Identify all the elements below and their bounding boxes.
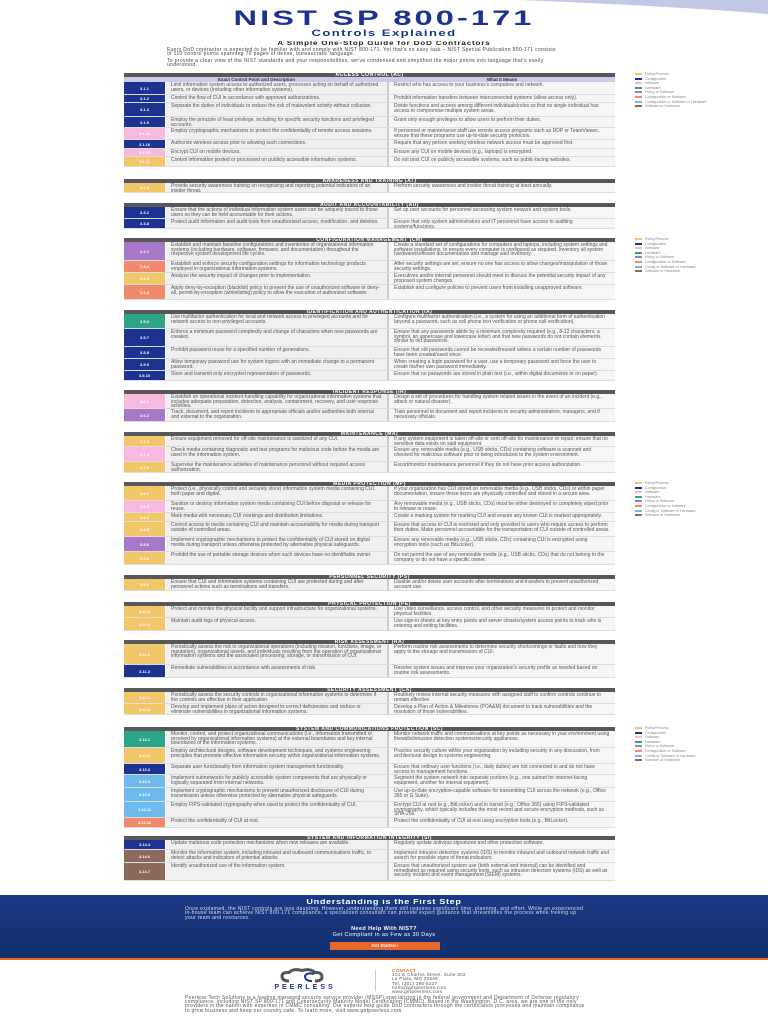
contact block: hello@getpeerless.com [392,985,446,990]
panel: media protection: 3.8.1 [140,490,149,496]
legend 1: Software or Hardware [645,104,680,108]
panel: access control: If personnel or maintenance staff use remote access programs such as RDP or TeamViewer, ensure that these programs use up-to-date security protocols. [394,128,599,139]
panel: media protection: 3.8.4 [140,514,149,520]
panel: configuration management: Executives and/or internal personnel should meet to discuss the potential security impact of any proposed system changes. [394,273,606,284]
panel: media protection: Protect (i.e., physically control and securely store) information system media containing CUI, both paper and digital. [171,486,375,497]
panel: media protection [124,481,615,565]
panel: system and information integrity: SYSTEM AND INFORMATION INTEGRITY (SI) [307,835,432,841]
panel: personnel security: 3.9.2 [140,582,149,587]
panel: incident response: 3.6.1 [140,398,149,404]
legend 3: Policy/Process [645,481,669,485]
button: get started: Get Started › [371,943,398,948]
legend 4: Config or Software or Hardware [645,754,696,758]
panel: configuration management [124,237,615,300]
contact block: 101 E Charles Street, Suite 302 [392,972,466,977]
panel: access control: 3.1.3 [140,107,149,112]
contact block: www.getpeerless.com [392,989,442,994]
panel: media protection: Ensure that access to CUI is restricted and only provided to users who require access to perform their duties. Make personnel accountable for the transportation of CUI outside of controlled areas. [394,522,610,533]
banner heading: Understanding is the First Step [306,899,462,906]
panel: system and communications protection: Protect the confidentiality of CUI at rest. [171,818,259,824]
banner: understanding is the first step [0,895,768,960]
panel: personnel security: Ensure that CUI and information systems containing CUI are protected during and after personnel actions such as terminations and transfers. [171,579,364,590]
panel: system and information integrity: Update malicious code protection mechanisms when new releases are available. [171,840,350,846]
panel: security assessment: 3.12.2 [139,706,150,712]
call to action text [332,926,435,938]
panel: access control: 3.1.5 [140,120,149,124]
panel: maintenance: Ensure equipment removed for off-site maintenance is sanitized of any CUI. [171,436,338,442]
panel: system and communications protection: 3.13.1 [139,736,150,742]
legend 4: Policy or Software [645,744,674,748]
panel: security assessment: SECURITY ASSESSMENT (CA) [327,687,412,693]
panel: security assessment: Routinely review internal security measures with assigned staff to confirm controls continue to remain effective. [394,692,601,703]
panel: access control: Restrict who has access to your business's computers and network. [394,82,544,88]
panel: media protection: 3.8.8 [140,556,149,560]
panel: media protection: MEDIA PROTECTION (MP) [333,481,406,487]
panel: identification and authentication: Configure multifactor authentication (i.e., a system for using an additional form of authentication beyond a password, such as cell phone text verification or phone call verification). [394,314,605,325]
legend 3: Configuration [645,486,666,490]
panel: audit and accountability [124,202,615,229]
legend 3: Software [645,490,659,494]
panel: configuration management: 3.4.2 [140,264,149,269]
panel: physical protection: 3.10.4 [139,622,150,626]
legend 2: Software or Hardware [645,269,680,273]
divider [375,970,376,991]
panel: security assessment: 3.12.1 [139,695,150,700]
panel: identification and authentication: 3.5.7 [140,335,149,340]
panel: access control: 3.1.1 [140,86,149,90]
panel: system and information integrity: Implement intrusion detection systems (IDS) to monitor inbound and outbound network traffic and search for possible signs of threat indicators. [394,850,609,861]
legend 2: Hardware [645,251,661,255]
panel: access control: Encrypt CUI on mobile devices. [171,149,241,155]
title: NIST SP 800-171 [233,7,535,30]
panel: system and communications protection: Monitor network traffic and communications at key points as necessary in your environment using firewalls/intrusion detection systems/security appliances. [394,731,609,742]
panel: system and communications protection: 3.13.3 [139,766,150,772]
contact block: CONTACT [392,968,416,973]
panel: system and communications protection: Segment the system network into separate portions (e.g., one subnet for internet-facing equipment, another for internal equipment). [394,775,587,786]
panel: access control: 3.1.2 [140,96,149,101]
legend 4: Hardware [645,740,661,744]
panel: risk assessment: 3.11.1 [139,652,150,656]
panel: system and information integrity: 3.14.4 [139,842,150,847]
panel: awareness and training: 3.2.3 [140,185,149,190]
panel: risk assessment: Remediate vulnerabilities in accordance with assessments of risk. [171,665,316,671]
panel: security assessment [124,687,615,715]
legend 2: Policy/Process [645,237,669,241]
panel: system and communications protection: Employ FIPS-validated cryptography when used to protect the confidentiality of CUI. [171,802,357,808]
panel: system and communications protection: Implement subnetworks for publicly accessible system components that are physically or logically separated from internal networks. [171,775,367,786]
panel: personnel security: PERSONNEL SECURITY (PS) [329,574,410,580]
panel: maintenance: Check media containing diagnostic and test programs for malicious code before the media are used in the information system. [171,447,379,458]
panel: identification and authentication: When creating a login password for a user, use a temporary password and force the user to create his/her own password immediately. [394,359,596,370]
panel: configuration management: Establish and maintain baseline configurations and inventories of organizational information systems (including hardware, software, firmware, and documentation) throughout the respective system development life cycles. [171,242,373,257]
panel: system and information integrity: 3.14.7 [139,869,150,874]
legend 4: Configuration or Software [645,749,686,753]
panel: incident response: INCIDENT RESPONSE (IR) [333,389,406,395]
panel: access control: Ensure any CUI on mobile devices (e.g., laptops) is encrypted. [394,149,532,155]
legend 4: Policy/Process [645,726,669,730]
panel: system and communications protection: Monitor, control, and protect organizational communications (i.e., information transmitted or received by organizational information systems) at the external boundaries and key internal boundaries of the information systems. [171,731,372,746]
logo: peerless [274,968,336,991]
panel: system and communications protection: Use up-to-date encryption-capable software for transmitting CUI across the network (e.g., Office 365 or G Suite). [394,788,606,799]
panel: incident response: Track, document, and report incidents to appropriate officials and/or authorities both internal and external to the organization. [171,409,374,420]
panel: identification and authentication: Ensure that old passwords cannot be recreated/reused unless a certain number of passwords have been created/used since. [394,347,601,358]
panel: system and communications protection: Practice security culture within your organization by including security in any discussion, from architectural design to systems engineering. [394,748,600,759]
panel: physical protection: PHYSICAL PROTECTION (PE) [328,601,411,607]
panel: risk assessment: 3.11.3 [139,668,150,674]
panel: media protection: Create a marking system for marking CUI and ensure any known CUI is marked appropriately. [394,513,602,519]
panel: physical protection: Use sign-in sheets at key entry points and server closets/system access points to track who is entering and exiting facilities. [394,618,601,629]
panel: identification and authentication: Allow temporary password use for system logons with an immediate change to a permanent password. [171,359,374,370]
panel: access control: Exact Control Point and Description [218,77,295,82]
panel: physical protection: 3.10.2 [139,609,150,614]
panel: incident response: 3.6.2 [140,412,149,418]
panel: risk assessment: Perform routine risk assessments to determine security shortcomings or faults and how they apply to the storage and transmission of CUI. [394,644,597,655]
legend 4 [635,726,696,762]
panel: identification and authentication: IDENTIFICATION AND AUTHENTICATION (IA) [307,309,432,315]
panel: access control: Do not post CUI on publicly accessible systems, such as public-facing websites. [394,157,571,163]
panel: access control: Limit information system access to authorized users, processes acting on behalf of authorized users, or devices (including other information systems). [171,82,378,93]
panel: personnel security [124,574,615,591]
panel: system and information integrity: Ensure that unauthorized system use (both external and internal) can be identified and remediated as required using security tools, such as intrusion detection systems (IDS) as well as security incident and event management (SIEM) systems. [394,863,607,878]
panel: configuration management: Apply deny-by-exception (blacklist) policy to prevent the use of unauthorized software or deny-all, permit-by-exception (whitelisting) policy to allow the execution of authorized software. [171,285,380,296]
panel: configuration management: Establish and configure policies to prevent users from installing unapproved software. [394,285,583,291]
panel: personnel security: Disable and/or delete user accounts after terminations and transfers to prevent unauthorized account use. [394,579,598,590]
panel: audit and accountability: Set up user accounts for personnel accessing system network and system tools. [394,207,572,213]
panel: access control: Separate the duties of individuals to reduce the risk of malevolent activity without collusion. [171,103,372,109]
panel: media protection: 3.8.5 [140,526,149,532]
call to action text: Need Help With NIST? [351,926,417,932]
panel: access control: ACCESS CONTROL (AC) [335,72,404,78]
panel: access control: 3.1.19 [139,150,150,155]
panel: audit and accountability: Protect audit information and audit tools from unauthorized access, modification, and deletion. [171,219,379,225]
subtitle: controls explained: Controls Explained [311,28,456,38]
panel: identification and authentication: Ensure that any passwords abide by a minimum complexity required (e.g., 8-12 characters, a symbol, an uppercase and lowercase letter) and that new passwords do not contain elements similar to old passwords. [394,329,601,344]
decorative swoosh top right [522,0,768,14]
legend 1: Configuration or Software or Hardware [645,100,707,104]
panel: identification and authentication [124,309,615,381]
panel: access control: 3.1.16 [139,142,150,146]
legend 1: Policy or Software [645,90,674,94]
legend 2: Config or Software or Hardware [645,265,696,269]
panel: awareness and training [124,178,615,193]
panel: media protection: Sanitize or destroy information system media containing CUI before disposal or release for reuse. [171,501,371,512]
panel: risk assessment: Resolve system issues and improve your organization's security profile as needed based on routine risk assessments. [394,665,597,676]
panel: configuration management: Establish and enforce security configuration settings for information technology products employed in organizational information systems. [171,261,366,272]
panel: system and communications protection: 3.13.2 [139,753,150,758]
panel: system and information integrity: Identify unauthorized use of the information system. [171,863,286,869]
panel: audit and accountability: 3.3.2 [140,210,149,215]
legend 4: Configuration [645,731,666,735]
panel: access control: Divide functions and access among different individuals/roles so that no single individual has access to compromise multiple system areas. [394,103,598,114]
panel: system and communications protection: 3.13.8 [139,792,150,797]
legend 3: Software or Hardware [645,513,680,517]
panel: system and communications protection: Encrypt CUI at rest (e.g., BitLocker) and in transit (e.g., Office 365) using FIPS-validated cryptography, which typically includes the most recent and secure encryption methods, such as SHA-256. [394,802,604,817]
panel: configuration management: 3.4.4 [140,276,149,281]
panel: maintenance [124,431,615,473]
panel: incident response: Design a set of procedures for handling system related issues in the event of an incident (e.g., attack or natural disaster). [394,394,602,405]
panel: system and communications protection: Separate user functionality from information system management functionality. [171,764,344,770]
panel: access control: Employ cryptographic mechanisms to protect the confidentiality of remote access sessions. [171,128,372,134]
legend 1: Hardware [645,86,661,90]
panel: audit and accountability: Ensure that the actions of individual information system users can be uniquely traced to those users so they can be held accountable for their actions. [171,207,378,218]
button: get started [330,942,440,950]
legend 2: Configuration or Software [645,260,686,264]
panel: configuration management: 3.4.1 [140,248,149,254]
panel: identification and authentication: Ensure that no passwords are stored in plain text (i.e., within digital documents or on paper). [394,371,598,377]
panel: identification and authentication: 3.5.9 [140,362,149,367]
legend 2: Configuration [645,242,666,246]
panel: identification and authentication: 3.5.10 [139,373,150,378]
panel: access control: Control information posted or processed on publicly accessible information systems. [171,157,357,163]
panel: maintenance: MAINTENANCE (MA) [341,431,398,437]
panel: configuration management: CONFIGURATION MANAGEMENT (CM) [316,237,423,243]
panel: system and communications protection: Implement cryptographic mechanisms to prevent unauthorized disclosure of CUI during transmission unless otherwise protected by alternative physical safeguards. [171,788,364,799]
legend 3: Hardware [645,495,661,499]
panel: media protection: Prohibit the use of portable storage devices when such devices have no identifiable owner. [171,552,371,558]
legend 1: Software [645,81,659,85]
panel: system and communications protection: Protect the confidentiality of CUI at rest using encryption tools (e.g., BitLocker). [394,818,569,824]
panel: configuration management: 3.4.8 [140,290,149,294]
panel: incident response: Train personnel to document and report incidents to security administrators, managers, and if necessary officials. [394,409,600,420]
panel: media protection: 3.8.3 [140,504,149,509]
panel: maintenance: 3.7.6 [140,464,149,470]
panel: awareness and training: AWARENESS AND TRAINING (AT) [322,178,417,184]
legend 2: Software [645,246,659,250]
intro text: To provide a clear view of the NIST standards and your responsibilities, we've condensed and simplified the major points into language that's easily understood. [167,58,544,68]
panel: media protection: Mark media with necessary CUI markings and distribution limitations. [171,513,324,519]
panel: access control: Authorize wireless access prior to allowing such connections. [171,140,306,146]
legend 2 [635,237,696,273]
panel: access control: Prohibit information transfers between interconnected systems (allow access only). [394,95,577,101]
footer paragraph: Peerless Tech Solutions is a leading managed security service provider (MSSP) specializing in the federal government and Department of Defense regulatory compliance, including NIST SP 800-171 and Cybersecurity Maturity Model Certification (CMMC). Based in the Washington, D.C. area, we are one of the only providers in the nation with expertise in CMMC consulting. Our experts help guide DoD contractors through the certification processes and maintain compliance to grow business and keep our country safe. To learn more, visit www.getpeerless.com. [185,995,584,1014]
panel: media protection: Control access to media containing CUI and maintain accountability for media during transport outside of controlled areas. [171,522,379,533]
panel: identification and authentication: Store and transmit only encrypted representation of passwords. [171,371,311,377]
legend 3: Config or Software or Hardware [645,509,696,513]
legend 3 [635,481,696,517]
legend 3: Policy or Software [645,499,674,503]
panel: physical protection [124,601,615,631]
panel: system and communications protection: 3.13.11 [138,807,151,812]
panel: configuration management: After security settings are set, ensure no one has access to allow changes/manipulation of those security settings. [394,261,607,272]
panel: identification and authentication: 3.5.8 [140,350,149,355]
panel: configuration management: Analyze the security impact of changes prior to implementation. [171,273,311,279]
contact block: La Plata, MD 20646 [392,976,438,981]
intro text [167,47,556,68]
panel: identification and authentication: Prohibit password reuse for a specified number of generations. [171,347,310,353]
panel: access control: What It Means [487,77,517,82]
legend 2: Policy or Software [645,255,674,259]
panel: media protection: 3.8.6 [140,542,149,546]
legend 4: Software [645,735,659,739]
logo: peerless: PEERLESS [274,984,336,991]
panel: media protection: If your organization has CUI stored on removable media (e.g., USB sticks, CDs) or within paper documentation, ensure those items are physically controlled and stored in a secure area. [394,486,605,497]
legend 1 [635,72,707,108]
panel: access control [124,72,615,167]
panel: maintenance: Ensure any removable media (e.g., USB sticks, CDs) containing software is scanned and checked for malicious software prior to being introduced to the system environment. [394,447,591,458]
panel: audit and accountability: AUDIT AND ACCOUNTABILITY (AU) [320,202,419,208]
panel: risk assessment [124,639,615,678]
panel: physical protection: Protect and monitor the physical facility and support infrastructure for organizational systems. [171,606,377,612]
panel: physical protection: Use video surveillance, access control, and other security measures to protect and monitor physical facilities. [394,606,595,617]
panel: access control: Grant only enough privileges to allow users to perform their duties. [394,117,541,123]
panel: risk assessment: Periodically assess the risk to organizational operations (including mission, functions, image, or reputation), organizational assets, and individuals resulting from the operation of organizational information systems and the associated processing, storage, or transmission of CUI. [171,644,381,659]
panel: system and information integrity [124,835,615,881]
panel: system and communications protection [124,726,615,828]
panel: system and information integrity: Monitor the information system, including inbound and outbound communications traffic, to detect attacks and indicators of potential attacks. [171,850,371,861]
panel: system and information integrity: Regularly update antivirus signatures and other protection software. [394,840,544,846]
panel: system and communications protection: 3.13.16 [138,820,151,825]
panel: system and communications protection: Employ architectural designs, software development techniques, and systems engineering principles that promote effective information security within organizational information systems. [171,748,380,759]
panel: access control: Control the flow of CUI in accordance with approved authorizations. [171,95,320,101]
legend 1: Configuration [645,77,666,81]
intro text: Every DoD contractor is expected to be familiar with and comply with NIST 800-171. Yet that's no easy task – NIST Special Publication 800-171 consists of 110 control points spanning 76 pages of dense, bureaucratic language. [167,47,556,57]
panel: system and information integrity: 3.14.6 [139,854,150,858]
panel: media protection: Any removable media (e.g., USB sticks, CDs) must be either destroyed or completely wiped prior to release or reuse. [394,501,608,512]
panel: identification and authentication: Use multifactor authentication for local and network access to privileged accounts and for network access to non-privileged accounts. [171,314,368,325]
legend 3: Configuration or Software [645,504,686,508]
panel: access control: Require that any person seeking wireless network access must be approved first. [394,140,574,146]
panel: security assessment: Periodically assess the security controls in organizational information systems to determine if the controls are effective in their application. [171,692,376,703]
panel: identification and authentication: Enforce a minimum password complexity and change of characters when new passwords are created. [171,329,378,340]
legend 1: Configuration or Software [645,95,686,99]
banner paragraph: Once explained, the NIST controls are less daunting. However, understanding them still requires significant time, planning, and effort. While an experienced in-house team can achieve NIST 800-171 compliance, a specialized consultant can provide expert guidance that streamlines the process while freeing up your team and resources. [185,906,583,921]
contact block [392,968,466,994]
panel: media protection: Implement cryptographic mechanisms to protect the confidentiality of CUI stored on digital media during transport unless otherwise protected by alternative physical safeguards. [171,537,370,548]
contact block: Tel: (301) 396-5227 [392,981,438,986]
call to action text: Get Compliant in as Few as 30 Days [333,932,435,938]
panel: access control: 3.1.12 [139,131,150,136]
legend 4: Software or Hardware [645,758,680,762]
panel: audit and accountability: 3.3.8 [140,221,149,226]
panel: access control: 3.1.22 [139,159,150,164]
panel: risk assessment: RISK ASSESSMENT (RA) [335,639,404,645]
legend 1: Policy/Process [645,72,669,76]
panel: configuration management: Create a standard set of configurations for computers and laptops, including system settings and software installations, to ensure every computer is configured as required. Inventory all system hardware/software documentation and manage said inventory. [394,242,607,257]
panel: maintenance: Escort/monitor maintenance personnel if they do not have prior access authorization. [394,462,582,468]
panel: system and communications protection: 3.13.5 [139,778,150,784]
tagline: A Simple One-Stop Guide for DoD Contractors [277,41,491,47]
panel: identification and authentication: 3.5.3 [140,318,149,324]
panel: maintenance: 3.7.4 [140,452,149,456]
panel: physical protection: Maintain audit logs of physical access. [171,618,256,624]
panel: maintenance: 3.7.3 [140,438,149,444]
panel: awareness and training: Perform security awareness and insider threat training at least annually. [394,183,552,189]
panel: incident response [124,389,615,422]
panel: media protection: Do not permit the use of any removable media (e.g., USB sticks, CDs) that do not belong to the company or do not have a specific owner. [394,552,604,563]
panel: system and communications protection: SYSTEM AND COMMUNICATIONS PROTECTION (SC) [296,726,443,732]
panel: media protection: Ensure any removable media (e.g., USB sticks, CDs) containing CUI is encrypted using encryption tools (such as BitLocker). [394,537,587,548]
